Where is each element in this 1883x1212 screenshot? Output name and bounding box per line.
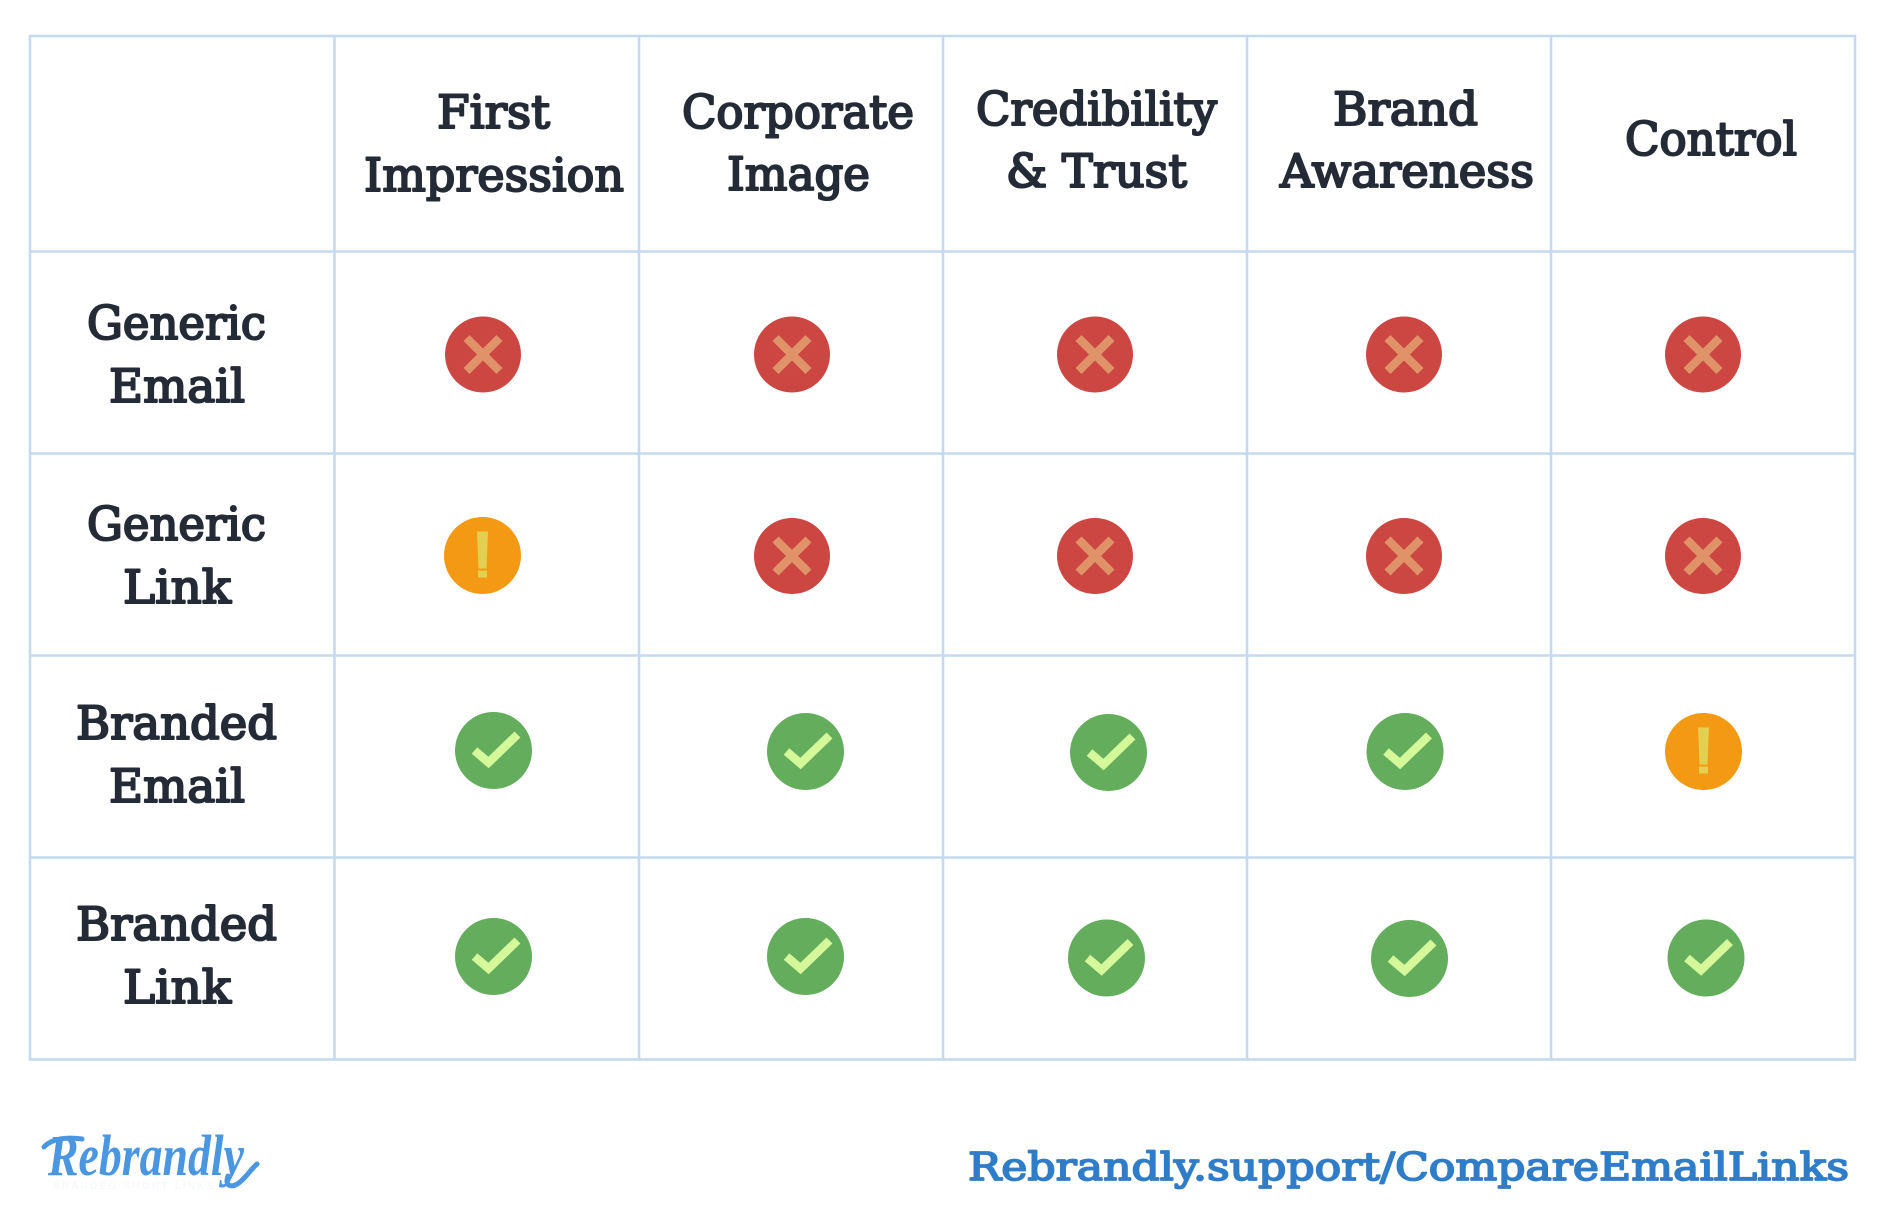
- row heading: Branded Email: Email: [109, 759, 245, 813]
- column heading: Control: Control: [1625, 112, 1797, 166]
- row heading: Generic Email: Generic: [87, 296, 266, 350]
- icon: check, Branded Link / Brand Awareness: [1371, 920, 1448, 997]
- column heading: Credibility & Trust: [976, 82, 1217, 198]
- row heading: Branded Link: Branded: [76, 897, 277, 951]
- column heading: Corporate Image: Image: [727, 147, 870, 201]
- icon: check, Branded Link / Control: [1668, 920, 1744, 996]
- column heading: Brand Awareness: Brand: [1333, 82, 1478, 136]
- column heading: Corporate Image: [682, 85, 914, 201]
- row heading: Branded Email: Branded: [76, 696, 277, 750]
- column heading: Credibility & Trust: & Trust: [1006, 144, 1188, 198]
- column heading: Credibility & Trust: Credibility: [976, 82, 1217, 136]
- row heading: Generic Link: [87, 497, 266, 614]
- column heading: Brand Awareness: Awareness: [1279, 144, 1534, 198]
- column heading: Corporate Image: Corporate: [682, 85, 914, 139]
- icon: warning, Branded Email / Control: [1665, 713, 1742, 790]
- row heading: Generic Email: Email: [109, 359, 245, 413]
- column heading: Brand Awareness: [1279, 82, 1534, 198]
- icon: cross, Generic Email / Corporate Image: [754, 316, 830, 392]
- icon: cross, Generic Link / Corporate Image: [754, 518, 830, 594]
- logo: Rebrandly: BRANDED SHORT LINKS: [53, 1181, 213, 1192]
- icon: check, Branded Link / Credibility: [1068, 920, 1145, 996]
- column heading: First Impression: First: [437, 85, 551, 139]
- icon: cross, Generic Email / First Impression: [445, 316, 521, 392]
- icon: cross, Generic Email / Credibility: [1057, 316, 1133, 392]
- icon: cross, Generic Link / Control: [1665, 518, 1741, 594]
- footer link: Rebrandly.support/CompareEmailLinks: [968, 1145, 1849, 1189]
- icon: cross, Generic Link / Credibility: [1057, 518, 1133, 594]
- row heading: Generic Link: Generic: [87, 497, 266, 551]
- icon: warning, Generic Link / First Impression: [444, 517, 521, 594]
- row heading: Branded Link: [76, 897, 277, 1014]
- column heading: First Impression: [364, 85, 624, 202]
- icon: check, Branded Email / Corporate Image: [767, 713, 844, 790]
- row heading: Generic Email: [87, 296, 266, 413]
- icon: cross, Generic Email / Brand Awareness: [1366, 316, 1442, 392]
- icon: check, Branded Email / Credibility: [1070, 714, 1147, 791]
- row heading: Branded Link: Link: [123, 960, 232, 1014]
- column heading: First Impression: Impression: [364, 148, 624, 202]
- logo: Rebrandly: Rebrandly: [47, 1123, 244, 1188]
- row heading: Generic Link: Link: [123, 560, 232, 614]
- icon: cross, Generic Email / Control: [1665, 316, 1741, 392]
- icon: check, Branded Link / Corporate Image: [767, 918, 844, 995]
- row heading: Branded Email: [76, 696, 277, 813]
- icon: check, Branded Email / First Impression: [455, 712, 532, 789]
- icon: cross, Generic Link / Brand Awareness: [1366, 518, 1442, 594]
- icon: check, Branded Email / Brand Awareness: [1366, 713, 1444, 790]
- icon: check, Branded Link / First Impression: [455, 918, 532, 995]
